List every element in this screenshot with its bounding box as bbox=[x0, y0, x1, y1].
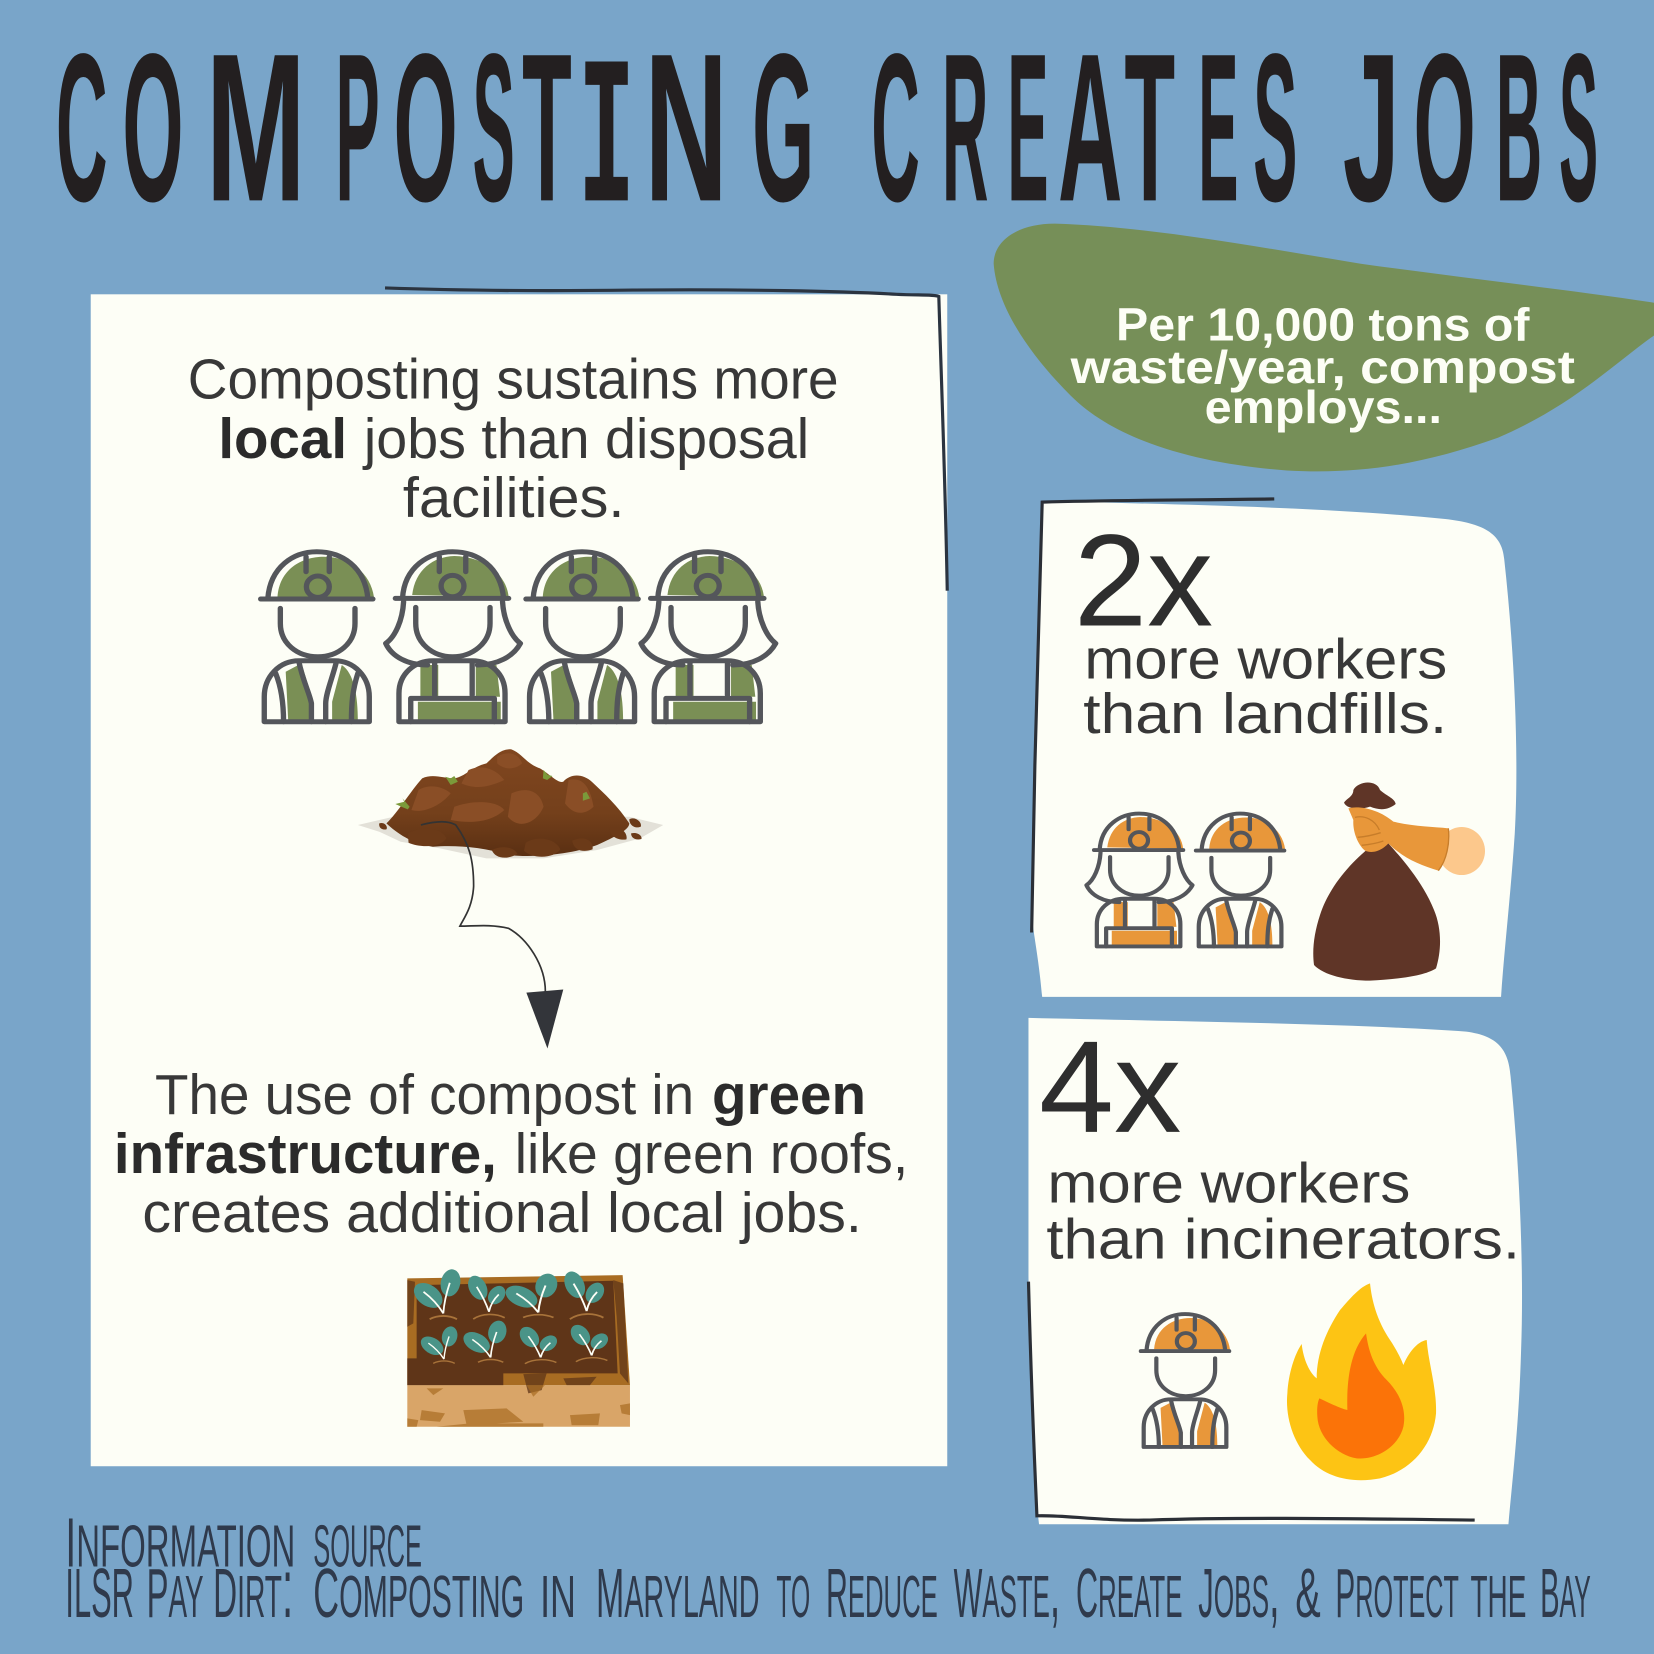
icon: planter box bbox=[407, 1267, 630, 1427]
footer line 2: Jobs, bbox=[1198, 1541, 1280, 1635]
title: O bbox=[393, 9, 458, 245]
footer line 2: & bbox=[1295, 1554, 1321, 1632]
text: than incinerators bbox=[1046, 1152, 1520, 1271]
text: green infrastructure: The use of compost in bbox=[155, 1063, 694, 1127]
title: R bbox=[942, 9, 988, 245]
title: P bbox=[335, 9, 380, 245]
text: green infrastructure bbox=[114, 1063, 908, 1245]
stat: 2x: 2x bbox=[1074, 508, 1213, 654]
text: green infrastructure: green bbox=[712, 1063, 866, 1127]
text: composting sustains: facilities. bbox=[403, 466, 624, 530]
icon: orange worker bbox=[1141, 1314, 1230, 1447]
title: M bbox=[206, 9, 306, 245]
arrow bbox=[421, 822, 563, 1049]
footer line 2: to bbox=[776, 1541, 810, 1635]
title: N bbox=[645, 9, 728, 245]
text: than landfills bbox=[1083, 627, 1447, 746]
icon: compost pile bbox=[358, 749, 663, 858]
footer line 2: Composting bbox=[313, 1541, 524, 1635]
title: S bbox=[1253, 9, 1297, 245]
footer line 2: Waste, bbox=[954, 1541, 1060, 1635]
callout: per 10,000 tons: Per 10,000 tons of bbox=[1116, 299, 1530, 351]
text: green infrastructure: like green roofs, bbox=[515, 1122, 908, 1186]
title: J bbox=[1343, 9, 1400, 245]
footer line 2: Create bbox=[1076, 1541, 1182, 1635]
footer line 2 bbox=[65, 1541, 1591, 1635]
information source footer: source bbox=[313, 1490, 422, 1584]
title: B bbox=[1496, 9, 1542, 245]
text: composting sustains: Composting sustains more bbox=[188, 348, 839, 412]
title: T bbox=[522, 9, 572, 245]
footer line 2: Maryland bbox=[596, 1541, 759, 1635]
callout: per 10,000 tons bbox=[994, 224, 1654, 471]
text: than landfills: than landfills. bbox=[1083, 682, 1447, 746]
title: E bbox=[1198, 9, 1238, 245]
text: green infrastructure: infrastructure, bbox=[114, 1122, 497, 1186]
footer line 2: the bbox=[1470, 1541, 1526, 1635]
text: than incinerators: than incinerators. bbox=[1046, 1207, 1520, 1271]
text: than landfills: more workers bbox=[1084, 627, 1447, 691]
footer line 2: Reduce bbox=[826, 1541, 938, 1635]
callout: per 10,000 tons: waste/year, compost bbox=[1070, 341, 1575, 393]
information source footer bbox=[65, 1490, 1591, 1635]
footer line 2: Pay bbox=[147, 1541, 204, 1635]
footer line 1: Information bbox=[65, 1490, 295, 1584]
callout: per 10,000 tons: employs... bbox=[1205, 381, 1442, 433]
text: composting sustains: local bbox=[218, 407, 347, 471]
title: E bbox=[1007, 9, 1049, 245]
title: G bbox=[752, 9, 814, 245]
title: O bbox=[1413, 9, 1476, 245]
panel: 4x incinerators bbox=[1028, 1014, 1522, 1524]
footer line 2: Dirt: bbox=[213, 1541, 293, 1635]
text: composting sustains bbox=[188, 348, 839, 530]
title: S bbox=[473, 9, 515, 245]
title: T bbox=[1124, 9, 1175, 245]
text: than incinerators: more workers bbox=[1047, 1152, 1410, 1216]
icon: four green workers bbox=[261, 552, 776, 722]
footer line 2: Protect bbox=[1335, 1541, 1459, 1635]
text: green infrastructure: creates additional local jobs. bbox=[142, 1181, 862, 1245]
title: I bbox=[578, 25, 635, 264]
panel: local jobs bbox=[91, 288, 947, 1466]
title: C bbox=[871, 9, 920, 245]
footer line 2: ILSR bbox=[65, 1554, 134, 1632]
footer line 2: Bay bbox=[1540, 1541, 1591, 1635]
footer line 2: in bbox=[540, 1541, 576, 1635]
stat: 4x: 4x bbox=[1039, 1014, 1181, 1160]
icon: flame bbox=[1287, 1283, 1436, 1480]
text: composting sustains: jobs than disposal bbox=[362, 407, 809, 471]
title: O bbox=[122, 9, 184, 245]
title bbox=[56, 9, 1598, 264]
title: C bbox=[56, 9, 108, 245]
panel: 2x landfills bbox=[1032, 499, 1516, 997]
title: A bbox=[1058, 9, 1122, 245]
icon: two orange workers bbox=[1086, 814, 1285, 946]
icon: hand holding trash bag bbox=[1313, 783, 1485, 981]
